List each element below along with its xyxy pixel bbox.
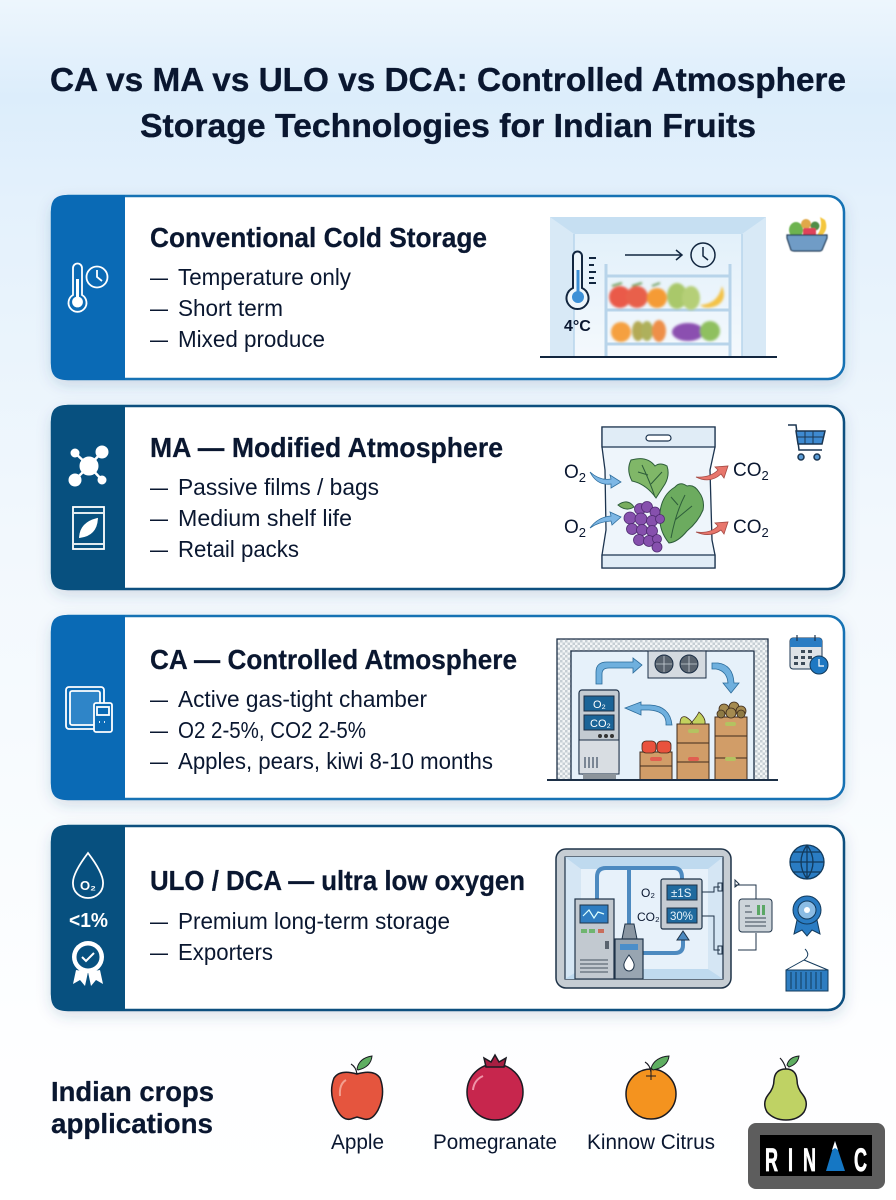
illustration: cold room xyxy=(540,217,777,357)
icon: shopping cart xyxy=(788,425,825,460)
label: Apple xyxy=(331,1131,384,1154)
bullet list: Short term xyxy=(178,295,283,321)
icon: shipping container xyxy=(786,949,828,991)
label: Kinnow Citrus xyxy=(587,1131,715,1154)
title: Storage Technologies for Indian Fruits xyxy=(140,107,756,144)
illustration: ULO system: O₂ xyxy=(641,886,655,900)
bullet list: — xyxy=(150,326,168,352)
bullet list: Medium shelf life xyxy=(178,505,352,531)
heading: Indian crops applications xyxy=(51,1076,214,1139)
bullet list: — xyxy=(150,505,168,531)
logo: RINAC: R xyxy=(765,1142,778,1178)
illustration: CA chamber: CO₂ xyxy=(590,718,611,730)
bullet list: — xyxy=(150,717,168,743)
bullet list: O2 2-5%, CO2 2-5% xyxy=(178,717,366,743)
bullet list: Retail packs xyxy=(178,536,299,562)
crop: apple xyxy=(331,1056,384,1154)
crate fruit xyxy=(642,702,746,753)
logo: RINAC: I xyxy=(788,1142,793,1178)
bullet list xyxy=(150,908,450,965)
crop: kinnow citrus xyxy=(587,1056,715,1154)
gas labels and arrows: O xyxy=(564,517,579,538)
gas labels and arrows: CO xyxy=(733,517,762,538)
icon: oxygen drop xyxy=(73,853,103,898)
crates xyxy=(640,717,747,780)
label: below one percent: <1% xyxy=(69,910,108,932)
panel: ULO / DCA xyxy=(51,825,844,1011)
bullet list xyxy=(150,264,351,352)
title xyxy=(50,61,846,144)
heading: CA — Controlled Atmosphere xyxy=(150,644,517,675)
cooling unit xyxy=(648,651,706,678)
bullet list: — xyxy=(150,295,168,321)
logo: RINAC: N xyxy=(803,1142,816,1178)
illustration: cold room: 4°C xyxy=(564,318,591,335)
bullet list: — xyxy=(150,908,168,934)
icon: chamber and controller xyxy=(66,687,112,732)
gas labels and arrows: 2 xyxy=(762,525,769,540)
controller xyxy=(579,690,619,774)
bullet list: Temperature only xyxy=(178,264,351,290)
label: Pomegranate xyxy=(433,1131,557,1154)
bullet list: — xyxy=(150,536,168,562)
gas labels and arrows: 2 xyxy=(762,468,769,483)
illustration: ULO system: ±1S xyxy=(671,888,692,900)
illustration: CA chamber xyxy=(547,639,778,780)
bullet list: — xyxy=(150,474,168,500)
icon: leaf pack xyxy=(73,507,104,549)
gas labels and arrows: CO xyxy=(733,460,762,481)
icon: oxygen drop: O₂ xyxy=(80,878,96,893)
generator xyxy=(622,924,637,939)
panel: controlled atmosphere xyxy=(51,615,844,800)
icon: globe xyxy=(790,845,824,879)
bullet list: — xyxy=(150,748,168,774)
gas labels and arrows xyxy=(564,460,769,540)
bullet list: Apples, pears, kiwi 8-10 months xyxy=(178,748,493,774)
bullet list: — xyxy=(150,686,168,712)
icon: fruit basket xyxy=(787,217,827,251)
panel: conventional cold storage xyxy=(51,195,844,380)
bullet list xyxy=(150,474,379,562)
bullet list: Mixed produce xyxy=(178,326,325,352)
icon: calendar and clock xyxy=(790,635,828,674)
icon: award ribbon xyxy=(793,896,821,936)
crop: pear xyxy=(765,1056,806,1120)
bullet list: Exporters xyxy=(178,939,273,965)
air arrows xyxy=(596,658,739,725)
illustration: produce bag xyxy=(564,427,769,568)
icon: quality badge xyxy=(72,941,104,986)
gas labels and arrows: 2 xyxy=(579,525,586,540)
thermometer xyxy=(566,252,596,309)
heading: MA — Modified Atmosphere xyxy=(150,432,503,463)
icon: thermometer and clock xyxy=(69,264,108,312)
leaves xyxy=(618,459,704,543)
arrow and clock xyxy=(625,243,715,267)
logo: RINAC: C xyxy=(854,1142,867,1178)
gas labels and arrows: O xyxy=(564,462,579,483)
heading: Indian crops applications: Indian crops xyxy=(51,1076,214,1107)
panel: modified atmosphere xyxy=(51,405,844,590)
logo: RINAC xyxy=(748,1123,885,1189)
bullet list: Passive films / bags xyxy=(178,474,379,500)
bullet list: Active gas-tight chamber xyxy=(178,686,427,712)
bullet list: — xyxy=(150,264,168,290)
gas labels and arrows: 2 xyxy=(579,470,586,485)
illustration: ULO system: 30% xyxy=(670,911,693,923)
icon: molecule network xyxy=(69,446,108,486)
wiring xyxy=(702,880,756,954)
grapes xyxy=(624,502,664,552)
bullet list: — xyxy=(150,939,168,965)
control cabinet xyxy=(575,899,614,979)
heading: Conventional Cold Storage xyxy=(150,222,487,253)
bullet list: Premium long-term storage xyxy=(178,908,450,934)
sensor display xyxy=(661,879,702,929)
illustration: ULO system: CO₂ xyxy=(637,910,660,924)
crop: pomegranate xyxy=(433,1055,557,1154)
illustration: CA chamber: O₂ xyxy=(593,699,606,711)
bullet list xyxy=(150,686,493,774)
illustration: ULO system xyxy=(556,849,772,988)
gas pipes xyxy=(597,868,683,953)
heading: Indian crops applications: applications xyxy=(51,1108,213,1139)
heading: ULO / DCA — ultra low oxygen xyxy=(150,865,525,896)
title: CA vs MA vs ULO vs DCA: Controlled Atmosphere xyxy=(50,61,846,98)
